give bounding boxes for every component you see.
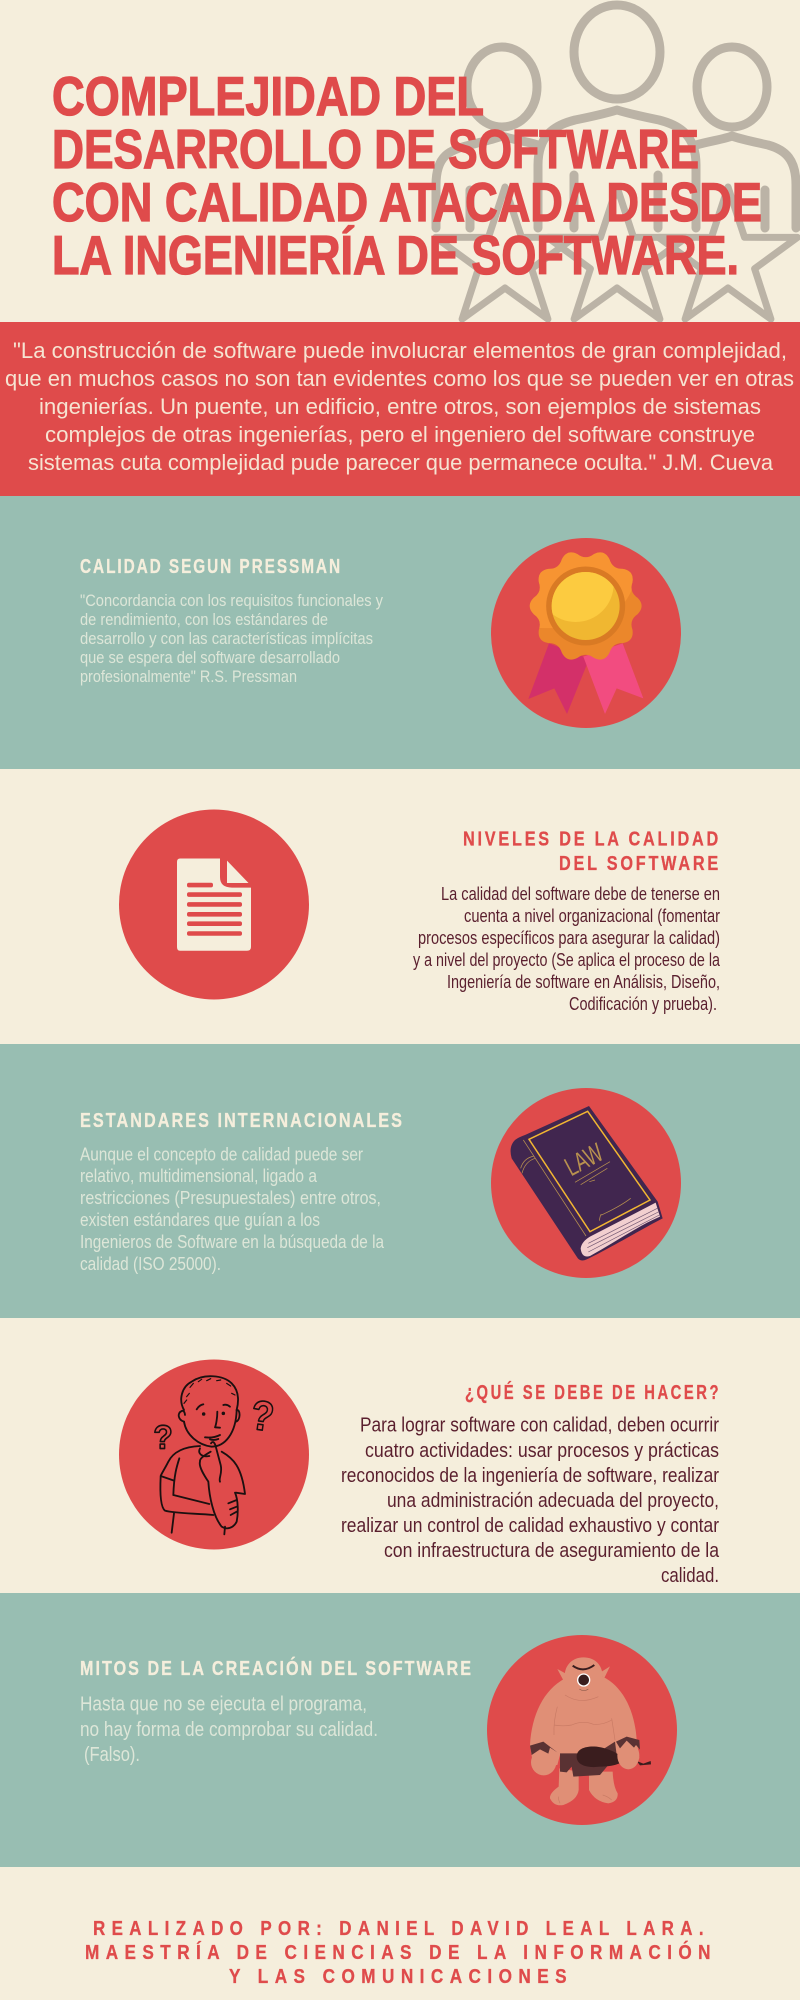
text block: estandares: existen estándares que guían a los — [80, 1210, 320, 1230]
quote text: que en muchos casos no son tan evidentes como los que se pueden ver en otras — [5, 366, 794, 391]
heading: niveles de la calidad: NIVELES DE LA CALIDAD — [463, 828, 721, 850]
quote text — [5, 338, 794, 475]
text block: estandares: restricciones (Presupuestales) entre otros, — [80, 1188, 381, 1208]
text block: actividades — [341, 1415, 720, 1587]
text block: Pressman definition: de rendimiento, con los estándares de — [80, 610, 328, 629]
text block: actividades: una administración adecuada del proyecto, — [387, 1490, 719, 1512]
icon: law book in circle: LAW — [560, 1137, 608, 1182]
title: COMPLEJIDAD DEL — [52, 65, 484, 127]
panel: estandares internacionales — [0, 1044, 800, 1318]
text block: mitos: Hasta que no se ejecuta el programa, — [80, 1694, 367, 1716]
heading: calidad segun Pressman: CALIDAD SEGUN PRESSMAN — [80, 556, 342, 578]
quote text: complejos de otras ingenierías, pero el ingeniero del software construye — [45, 422, 755, 447]
text block: actividades: reconocidos de la ingeniería de software, realizar — [341, 1465, 719, 1487]
credits text: Y LAS COMUNICACIONES — [229, 1966, 573, 1988]
text block: actividades: Para lograr software con calidad, deben ocurrir — [360, 1415, 719, 1437]
quote text: sistemas cuta complejidad pude parecer que permanece oculta." J.M. Cueva — [28, 450, 773, 475]
heading: mitos: MITOS DE LA CREACIÓN DEL SOFTWARE — [80, 1656, 473, 1680]
text block: estandares: relativo, multidimensional, ligado a — [80, 1166, 318, 1186]
text block: estandares — [80, 1144, 385, 1274]
panel: que se debe de hacer — [0, 1318, 800, 1593]
icon: document in circle — [119, 810, 309, 1000]
panel: niveles de la calidad — [0, 769, 800, 1044]
text block: mitos — [80, 1694, 378, 1766]
text block: niveles: cuenta a nivel organizacional (fomentar — [464, 906, 720, 926]
text block: Pressman definition: profesionalmente" R.S. Pressman — [80, 667, 297, 686]
text block: mitos: no hay forma de comprobar su calidad. — [80, 1719, 378, 1741]
panel: mitos de la creacion — [0, 1593, 800, 1867]
icon: medal in circle — [491, 536, 681, 728]
text block: Pressman definition: que se espera del software desarrollado — [80, 648, 340, 667]
text block: niveles: procesos específicos para asegurar la calidad) — [418, 928, 720, 948]
quote text: ingenierías. Un puente, un edificio, entre otros, son ejemplos de sistemas — [39, 394, 761, 419]
text block: estandares: Ingenieros de Software en la búsqueda de la — [80, 1232, 385, 1252]
text block: Pressman definition — [80, 591, 383, 686]
title — [52, 65, 762, 286]
heading: niveles de la calidad — [463, 828, 721, 875]
icon: thinking man in circle: ? — [153, 1420, 173, 1457]
text block: niveles — [413, 884, 721, 1014]
text block: actividades: calidad. — [661, 1565, 719, 1587]
credits text: MAESTRÍA DE CIENCIAS DE LA INFORMACIÓN — [85, 1940, 717, 1964]
panel: calidad segun Pressman — [0, 496, 800, 769]
icon: thinking man in circle — [119, 1360, 309, 1550]
credits text: REALIZADO POR: DANIEL DAVID LEAL LARA. — [93, 1918, 710, 1940]
text block: actividades: cuatro actividades: usar procesos y prácticas — [365, 1440, 719, 1462]
text block: estandares: calidad (ISO 25000). — [80, 1254, 221, 1274]
icon: law book in circle — [491, 1088, 681, 1278]
icon: cyclops in circle — [487, 1635, 677, 1825]
text block: Pressman definition: "Concordancia con los requisitos funcionales y — [80, 591, 383, 610]
text block: niveles: y a nivel del proyecto (Se aplica el proceso de la — [413, 950, 721, 970]
credits text — [85, 1918, 717, 1988]
text block: niveles: Ingeniería de software en Análisis, Diseño, — [447, 972, 720, 992]
text block: actividades: con infraestructura de aseguramiento de la — [384, 1540, 720, 1562]
text block: niveles: Codificación y prueba). — [569, 994, 717, 1014]
icon: three people with stars — [436, 5, 797, 319]
text block: actividades: realizar un control de calidad exhaustivo y contar — [341, 1515, 719, 1537]
panel: quote band — [0, 322, 800, 496]
text block: mitos: (Falso). — [84, 1744, 140, 1766]
panel: header — [0, 0, 800, 322]
heading: estandares internacionales: ESTANDARES INTERNACIONALES — [80, 1110, 404, 1132]
text block: estandares: Aunque el concepto de calidad puede ser — [80, 1144, 363, 1164]
text block: niveles: La calidad del software debe de tenerse en — [441, 884, 720, 904]
quote text: "La construcción de software puede involucrar elementos de gran complejidad, — [13, 338, 787, 363]
panel: footer — [0, 1867, 800, 2000]
heading: niveles de la calidad: DEL SOFTWARE — [559, 852, 721, 875]
icon: thinking man in circle: ? — [248, 1391, 277, 1440]
text block: Pressman definition: desarrollo y con las características implícitas — [80, 629, 373, 648]
